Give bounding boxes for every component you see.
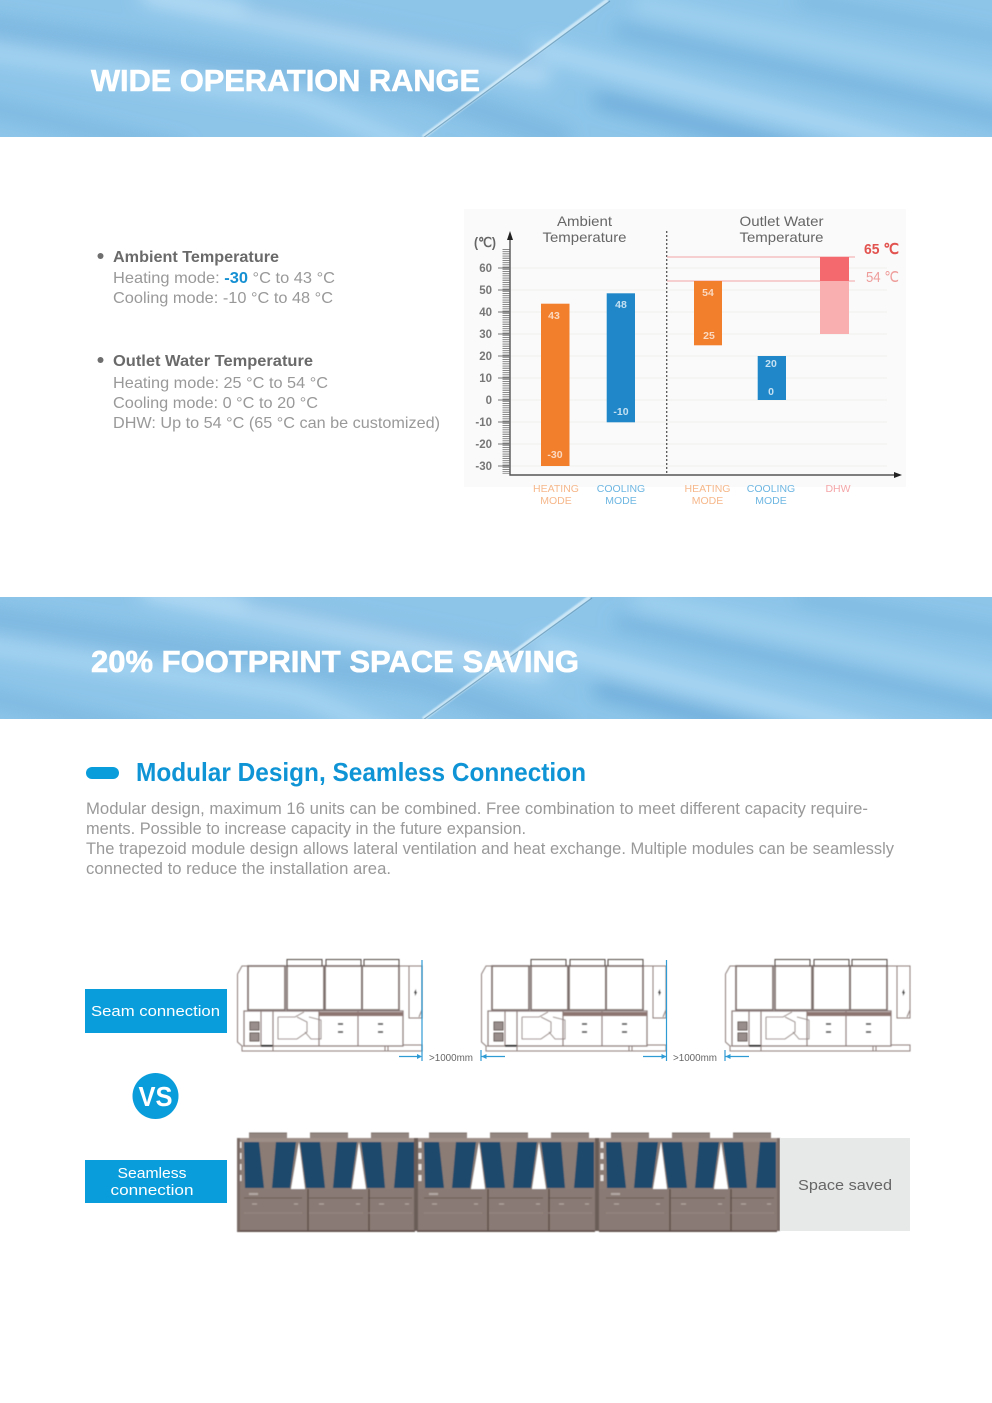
chart: temperature operating ranges xyxy=(464,209,906,507)
bar: outlet heating xyxy=(694,281,722,345)
y axis with ticks: -20 xyxy=(475,439,492,451)
bar: outlet heating: 25 xyxy=(703,330,715,342)
label: seam connection: Seam connection xyxy=(91,1003,220,1020)
bar: ambient cooling: -10 xyxy=(613,406,629,418)
bar: DHW xyxy=(820,257,849,334)
bar: ambient heating: -30 xyxy=(547,449,563,461)
diagram: separated units with clearance: >1000mm xyxy=(673,1053,717,1064)
chart column titles xyxy=(542,213,824,245)
chart category labels: MODE xyxy=(692,495,723,507)
bullet list: temperature ranges: Ambient Temperature xyxy=(113,249,279,266)
y axis with ticks: 30 xyxy=(479,329,492,341)
y axis with ticks: 40 xyxy=(479,307,492,319)
chart column titles: Temperature xyxy=(542,229,627,245)
bullet list: temperature ranges xyxy=(98,249,440,432)
bullet list: temperature ranges: Cooling mode: 0 °C to 20 °C xyxy=(113,395,318,412)
diagram: seamlessly joined units xyxy=(237,1133,780,1232)
chart column titles: Outlet Water xyxy=(740,213,824,229)
bullet list: temperature ranges: DHW: Up to 54 °C (65 °C can be customized) xyxy=(113,415,440,432)
paragraph: modular design description: ments. Possible to increase capacity in the future expansion. xyxy=(86,819,526,838)
y axis with ticks: 50 xyxy=(479,285,492,297)
paragraph: modular design description: connected to reduce the installation area. xyxy=(86,859,391,878)
y axis with ticks: 20 xyxy=(479,351,492,363)
bullet list: temperature ranges: Outlet Water Temperature xyxy=(113,353,313,370)
bar: outlet heating: 54 xyxy=(702,287,714,299)
bullet list: temperature ranges: Cooling mode: -10 °C to 48 °C xyxy=(113,290,333,307)
diagram: separated units with clearance: >1000mm xyxy=(429,1053,473,1064)
bullet list: temperature ranges: Heating mode: -30 °C to 43 °C xyxy=(113,270,335,287)
bar: ambient heating: 43 xyxy=(548,310,560,322)
label: seamless connection: connection xyxy=(110,1182,194,1199)
y axis with ticks: (℃) xyxy=(474,234,496,250)
chart category labels: MODE xyxy=(540,495,572,507)
y axis with ticks: 0 xyxy=(486,395,492,407)
y axis with ticks: -10 xyxy=(475,417,492,429)
chart column titles: Temperature xyxy=(740,229,824,245)
panel: space saved: Space saved xyxy=(798,1177,892,1194)
title: wide operation range: WIDE OPERATION RANGE xyxy=(91,63,480,98)
paragraph: modular design description: The trapezoid module design allows lateral ventilation and heat exchange. Multiple modules can be seamlessly xyxy=(86,839,894,858)
bar: outlet cooling: 20 xyxy=(765,358,777,370)
DHW temperature labels: 65 ℃ xyxy=(864,241,899,258)
chart category labels: HEATING xyxy=(533,483,579,495)
paragraph: modular design description: Modular design, maximum 16 units can be combined. Free combination to meet different capacity require- xyxy=(86,799,868,818)
y axis with ticks: -30 xyxy=(475,461,492,473)
DHW temperature labels: 54 ℃ xyxy=(866,269,899,286)
diagram: separated units with clearance xyxy=(238,960,910,1064)
icon: VS badge: VS xyxy=(138,1081,172,1112)
bar: outlet cooling: 0 xyxy=(768,386,774,398)
label: seamless connection: Seamless xyxy=(118,1165,186,1182)
chart column titles: Ambient xyxy=(557,213,612,229)
chart category labels: COOLING xyxy=(747,483,795,495)
y axis with ticks: 10 xyxy=(479,373,492,385)
DHW temperature labels xyxy=(864,241,899,286)
label: seam connection xyxy=(85,989,227,1033)
header band: wide operation range xyxy=(0,0,992,137)
paragraph: modular design description xyxy=(86,799,894,878)
chart category labels: COOLING xyxy=(597,483,645,495)
label: seamless connection xyxy=(85,1160,227,1203)
icon: VS badge xyxy=(132,1073,178,1119)
chart category labels xyxy=(533,483,851,507)
title: footprint space saving: 20% FOOTPRINT SPACE SAVING xyxy=(91,644,579,679)
header band: footprint space saving xyxy=(0,597,992,719)
bar: ambient cooling: 48 xyxy=(615,299,627,311)
panel: space saved xyxy=(780,1138,910,1231)
section heading: modular design: Modular Design, Seamless Connection xyxy=(136,757,586,787)
y axis with ticks xyxy=(474,231,902,478)
chart category labels: MODE xyxy=(605,495,637,507)
bullet list: temperature ranges: Heating mode: 25 °C to 54 °C xyxy=(113,375,328,392)
bar: outlet cooling xyxy=(758,356,786,400)
chart category labels: HEATING xyxy=(685,483,730,495)
bar: ambient heating xyxy=(541,304,570,466)
chart category labels: DHW xyxy=(825,483,851,495)
y axis with ticks: 60 xyxy=(479,263,492,275)
chart category labels: MODE xyxy=(755,495,787,507)
bar: ambient cooling xyxy=(607,293,635,422)
